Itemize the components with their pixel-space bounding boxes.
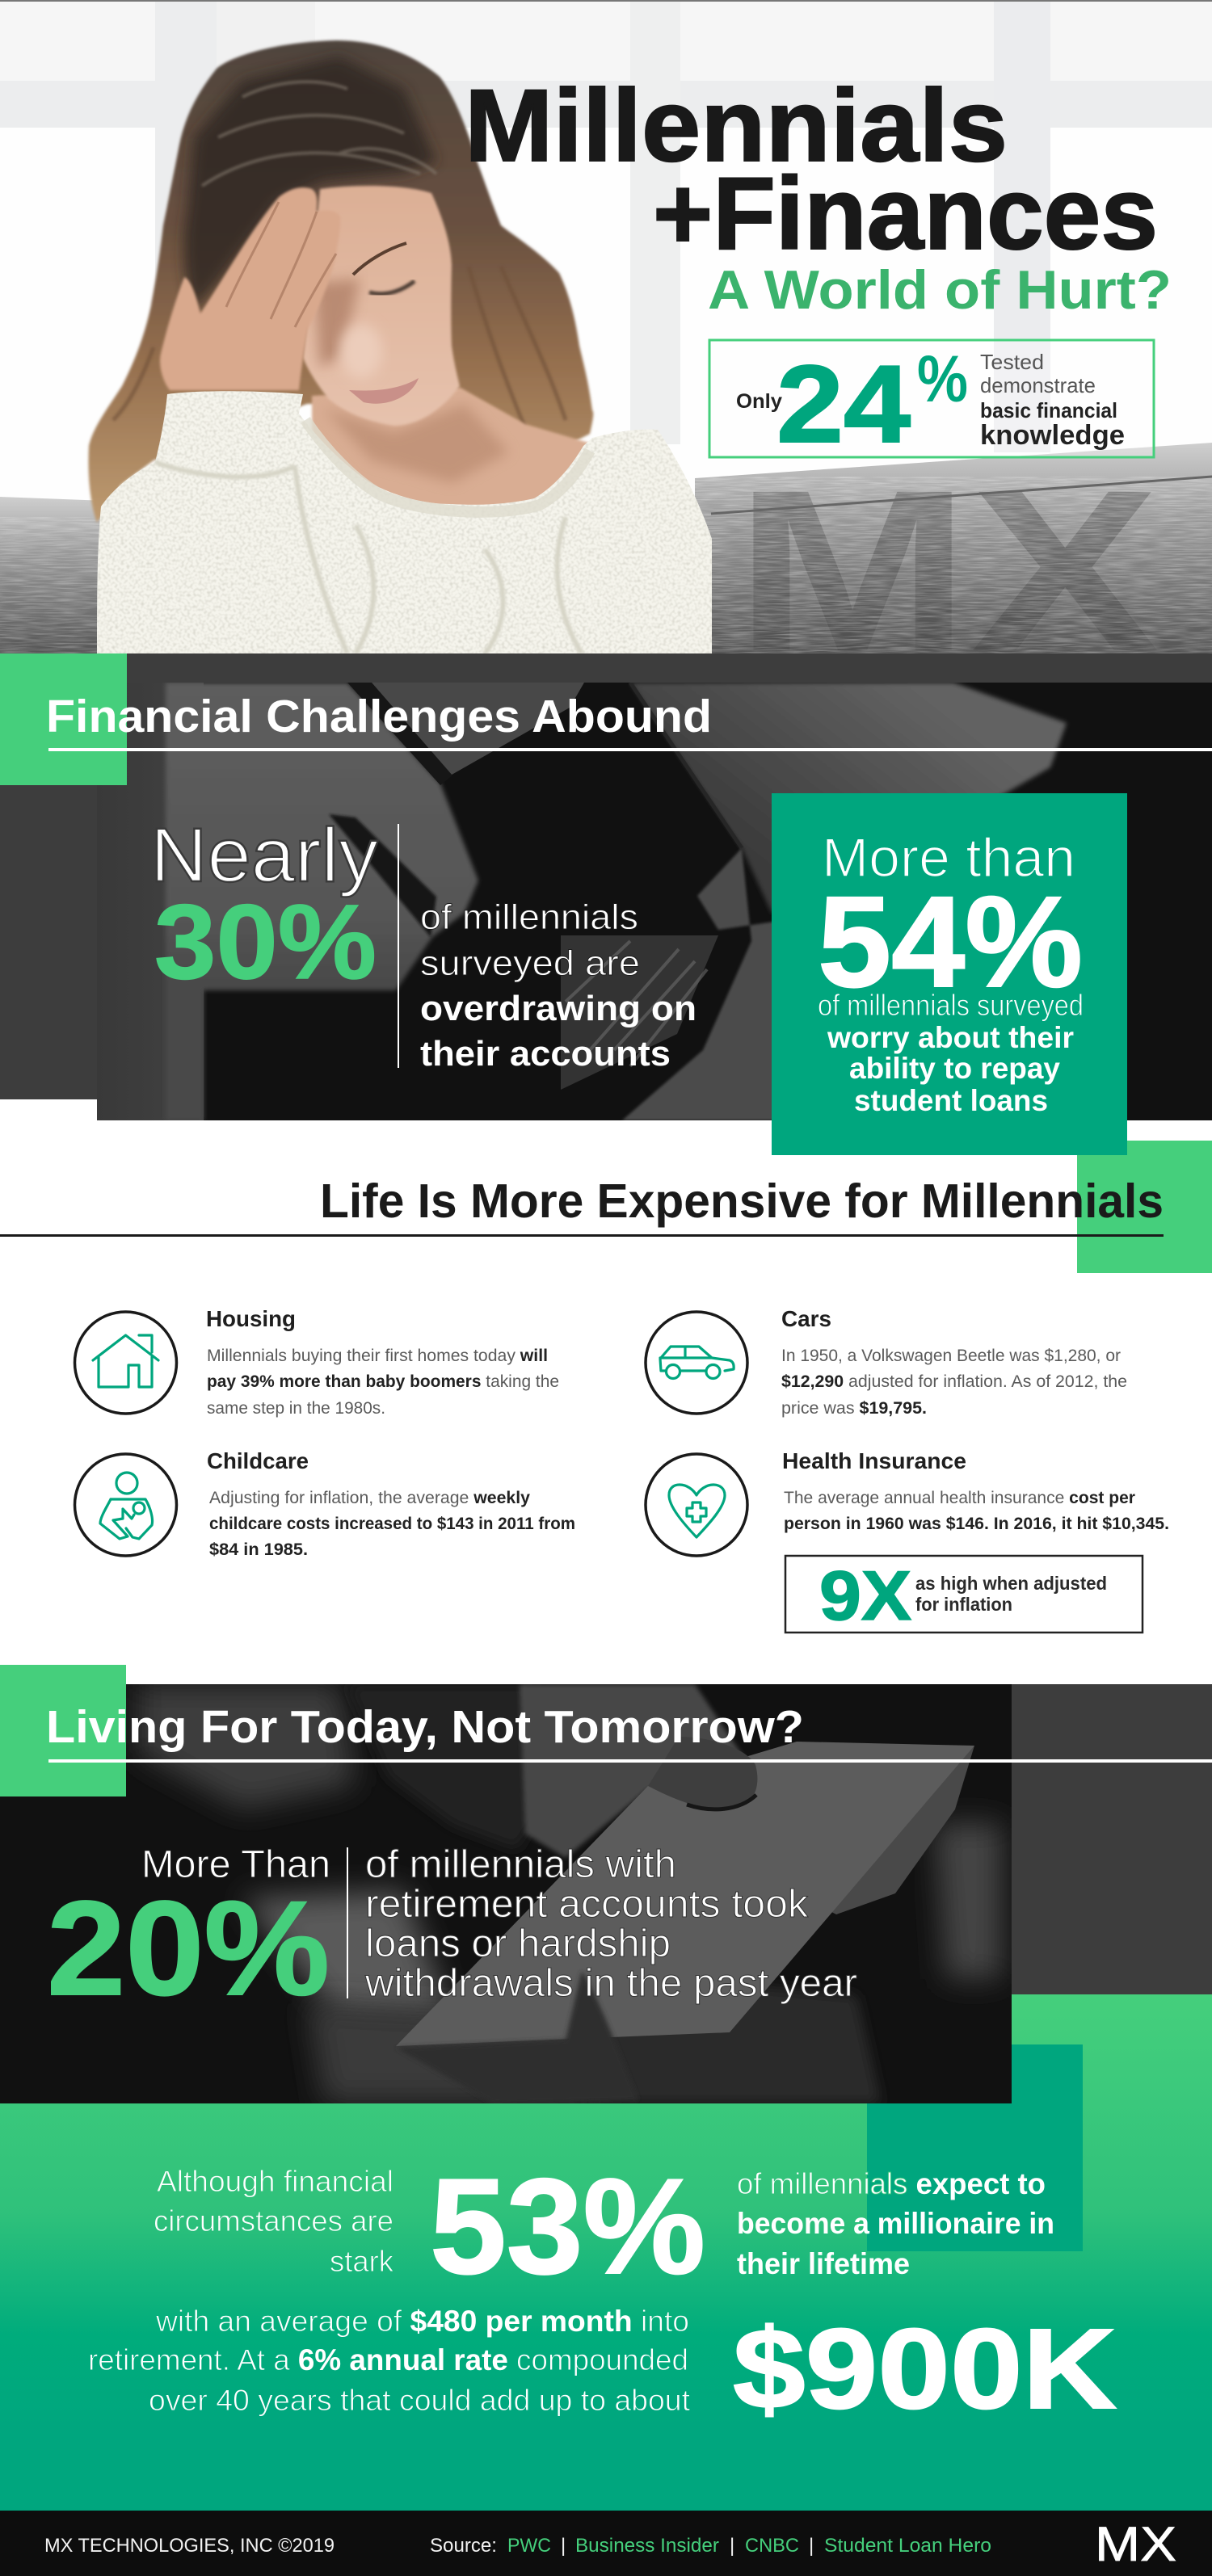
callout: only 24%: Only xyxy=(736,390,782,413)
stat: 53% expect to become millionaires: Although financial xyxy=(157,2165,393,2198)
stat: 53% expect to become millionaires: stark xyxy=(330,2245,393,2278)
source list: | xyxy=(561,2535,566,2557)
heading: life is more expensive: Life Is More Expensive for Millennials xyxy=(320,1175,1164,1228)
item: childcare: Adjusting for inflation, the average weekly xyxy=(209,1489,530,1507)
stat: nearly 30%: overdrawing on xyxy=(420,989,696,1028)
item: childcare: Childcare xyxy=(207,1448,309,1473)
item: cars: price was $19,795. xyxy=(781,1399,927,1418)
icon: heart with cross xyxy=(646,1454,747,1556)
source list xyxy=(430,2535,991,2557)
callout: only 24% xyxy=(709,340,1154,465)
dark grey band behind challenges section xyxy=(0,653,1212,1099)
callout: 9X as high: 9X xyxy=(819,1557,911,1635)
item: housing: same step in the 1980s. xyxy=(207,1399,385,1418)
hand xyxy=(160,187,340,390)
accent: teal square xyxy=(867,2044,1083,2251)
hero title: Millennials xyxy=(465,68,1008,183)
footer: MX TECHNOLOGIES, INC ©2019 xyxy=(44,2535,335,2557)
accent: dark grey block right xyxy=(1012,1684,1212,1994)
hair xyxy=(88,40,593,523)
sweater xyxy=(97,391,712,653)
accent: green square left xyxy=(0,653,127,785)
hero photo: woman on sofa xyxy=(0,0,1212,700)
stat: nearly 30%: of millennials xyxy=(420,897,638,937)
hero title: A World of Hurt? xyxy=(708,259,1172,321)
callout: only 24%: knowledge xyxy=(980,420,1125,451)
panel: more than 54%: 54% xyxy=(818,869,1083,1014)
icon: parent and baby xyxy=(74,1454,176,1556)
logo: MX: MX xyxy=(1095,2517,1176,2571)
stat: more than 20%: retirement accounts took xyxy=(365,1883,809,1926)
item: health insurance: person in 1960 was $146. In 2016, it hit $10,345. xyxy=(784,1515,1169,1533)
panel: more than 54%: More than xyxy=(822,827,1075,889)
stat: more than 20%: loans or hardship xyxy=(365,1923,671,1965)
stat: 53% expect to become millionaires: become a millionaire in xyxy=(737,2207,1054,2240)
callout: 9X as high: for inflation xyxy=(915,1594,1012,1615)
panel: paper hand-off photo xyxy=(0,1684,1012,2103)
stat: 53% expect to become millionaires: of millennials expect to xyxy=(737,2167,1046,2200)
heading: living for today xyxy=(46,1701,1212,1763)
heading: financial challenges abound: Financial Challenges Abound xyxy=(46,691,712,742)
accent: green square right xyxy=(1077,1141,1212,1273)
stat: nearly 30%: their accounts xyxy=(420,1034,671,1074)
item: childcare: childcare costs increased to $143 in 2011 from xyxy=(209,1515,575,1533)
stat: $900K retirement: over 40 years that could add up to about xyxy=(149,2384,691,2417)
stat: more than 20%: 20% xyxy=(47,1874,330,2023)
item: housing xyxy=(74,1306,559,1418)
item: housing: Housing xyxy=(206,1306,296,1331)
source list: | xyxy=(730,2535,734,2557)
stat: more than 20% xyxy=(47,1843,857,2023)
source list: Source: xyxy=(430,2535,497,2557)
callout: only 24%: basic financial xyxy=(980,398,1117,422)
panel: more than 54%: ability to repay xyxy=(849,1052,1060,1085)
stat: nearly 30%: Nearly xyxy=(150,813,378,898)
stat: 53% expect to become millionaires: their lifetime xyxy=(737,2247,910,2280)
stat: more than 20%: withdrawals in the past year xyxy=(364,1962,857,2005)
panel: more than 54% xyxy=(772,793,1127,1155)
item: health insurance: The average annual health insurance cost per xyxy=(784,1489,1135,1507)
panel: green gradient background xyxy=(0,1994,1212,2511)
item: cars: Cars xyxy=(781,1306,831,1331)
footer xyxy=(0,2511,1212,2576)
callout: only 24%: % xyxy=(917,342,968,416)
callout: only 24%: Tested xyxy=(980,350,1044,374)
item: childcare: $84 in 1985. xyxy=(209,1540,308,1559)
item: housing: pay 39% more than baby boomers taking the xyxy=(207,1372,559,1391)
heading: life is more expensive xyxy=(0,1175,1164,1237)
item: cars: In 1950, a Volkswagen Beetle was $1,280, or xyxy=(781,1347,1121,1365)
stat: nearly 30% xyxy=(150,813,696,1074)
stat: 53% expect to become millionaires xyxy=(154,2150,1054,2302)
face xyxy=(303,186,460,426)
stat: $900K retirement: with an average of $480 per month into xyxy=(155,2305,689,2338)
stat: nearly 30%: 30% xyxy=(154,882,377,1001)
item: cars: $12,290 adjusted for inflation. As of 2012, the xyxy=(781,1372,1127,1391)
panel: wallet photo xyxy=(97,683,1212,1120)
stat: $900K retirement: retirement. At a 6% annual rate compounded xyxy=(88,2343,688,2376)
callout: 9X as high: as high when adjusted xyxy=(915,1573,1107,1594)
hero title: +Finances xyxy=(653,156,1158,271)
panel: more than 54%: worry about their xyxy=(827,1021,1074,1054)
item: health insurance xyxy=(646,1448,1169,1556)
source list: | xyxy=(809,2535,814,2557)
accent: green square left (living section) xyxy=(0,1665,126,1796)
stat: $900K retirement: $900K xyxy=(733,2305,1117,2432)
hero title xyxy=(465,68,1172,321)
heading: living for today: Living For Today, Not Tomorrow? xyxy=(46,1701,804,1753)
callout: only 24%: 24 xyxy=(776,342,911,465)
item: childcare xyxy=(74,1448,575,1559)
source list: Business Insider xyxy=(575,2535,719,2557)
panel: more than 54%: student loans xyxy=(854,1084,1048,1117)
panel: more than 54%: of millennials surveyed xyxy=(818,989,1084,1022)
item: housing: Millennials buying their first homes today will xyxy=(207,1347,548,1365)
icon: car xyxy=(646,1312,747,1414)
stat: nearly 30%: surveyed are xyxy=(420,943,640,983)
hero photo: woman on sofa: MX xyxy=(734,443,1161,700)
callout: only 24%: demonstrate xyxy=(980,373,1096,397)
source list: Student Loan Hero xyxy=(824,2535,991,2557)
stat: more than 20%: of millennials with xyxy=(365,1843,676,1886)
stat: 53% expect to become millionaires: 53% xyxy=(430,2150,705,2302)
callout: 9X as high xyxy=(785,1556,1143,1635)
source list: PWC xyxy=(507,2535,551,2557)
stat: $900K retirement xyxy=(88,2305,1117,2432)
neck and chest xyxy=(312,388,594,517)
source list: CNBC xyxy=(745,2535,799,2557)
item: cars xyxy=(646,1306,1127,1418)
item: health insurance: Health Insurance xyxy=(782,1448,966,1473)
heading: financial challenges abound xyxy=(46,691,1212,751)
stat: 53% expect to become millionaires: circumstances are xyxy=(154,2204,393,2238)
icon: house xyxy=(74,1312,176,1414)
stat: more than 20%: More Than xyxy=(141,1843,330,1886)
